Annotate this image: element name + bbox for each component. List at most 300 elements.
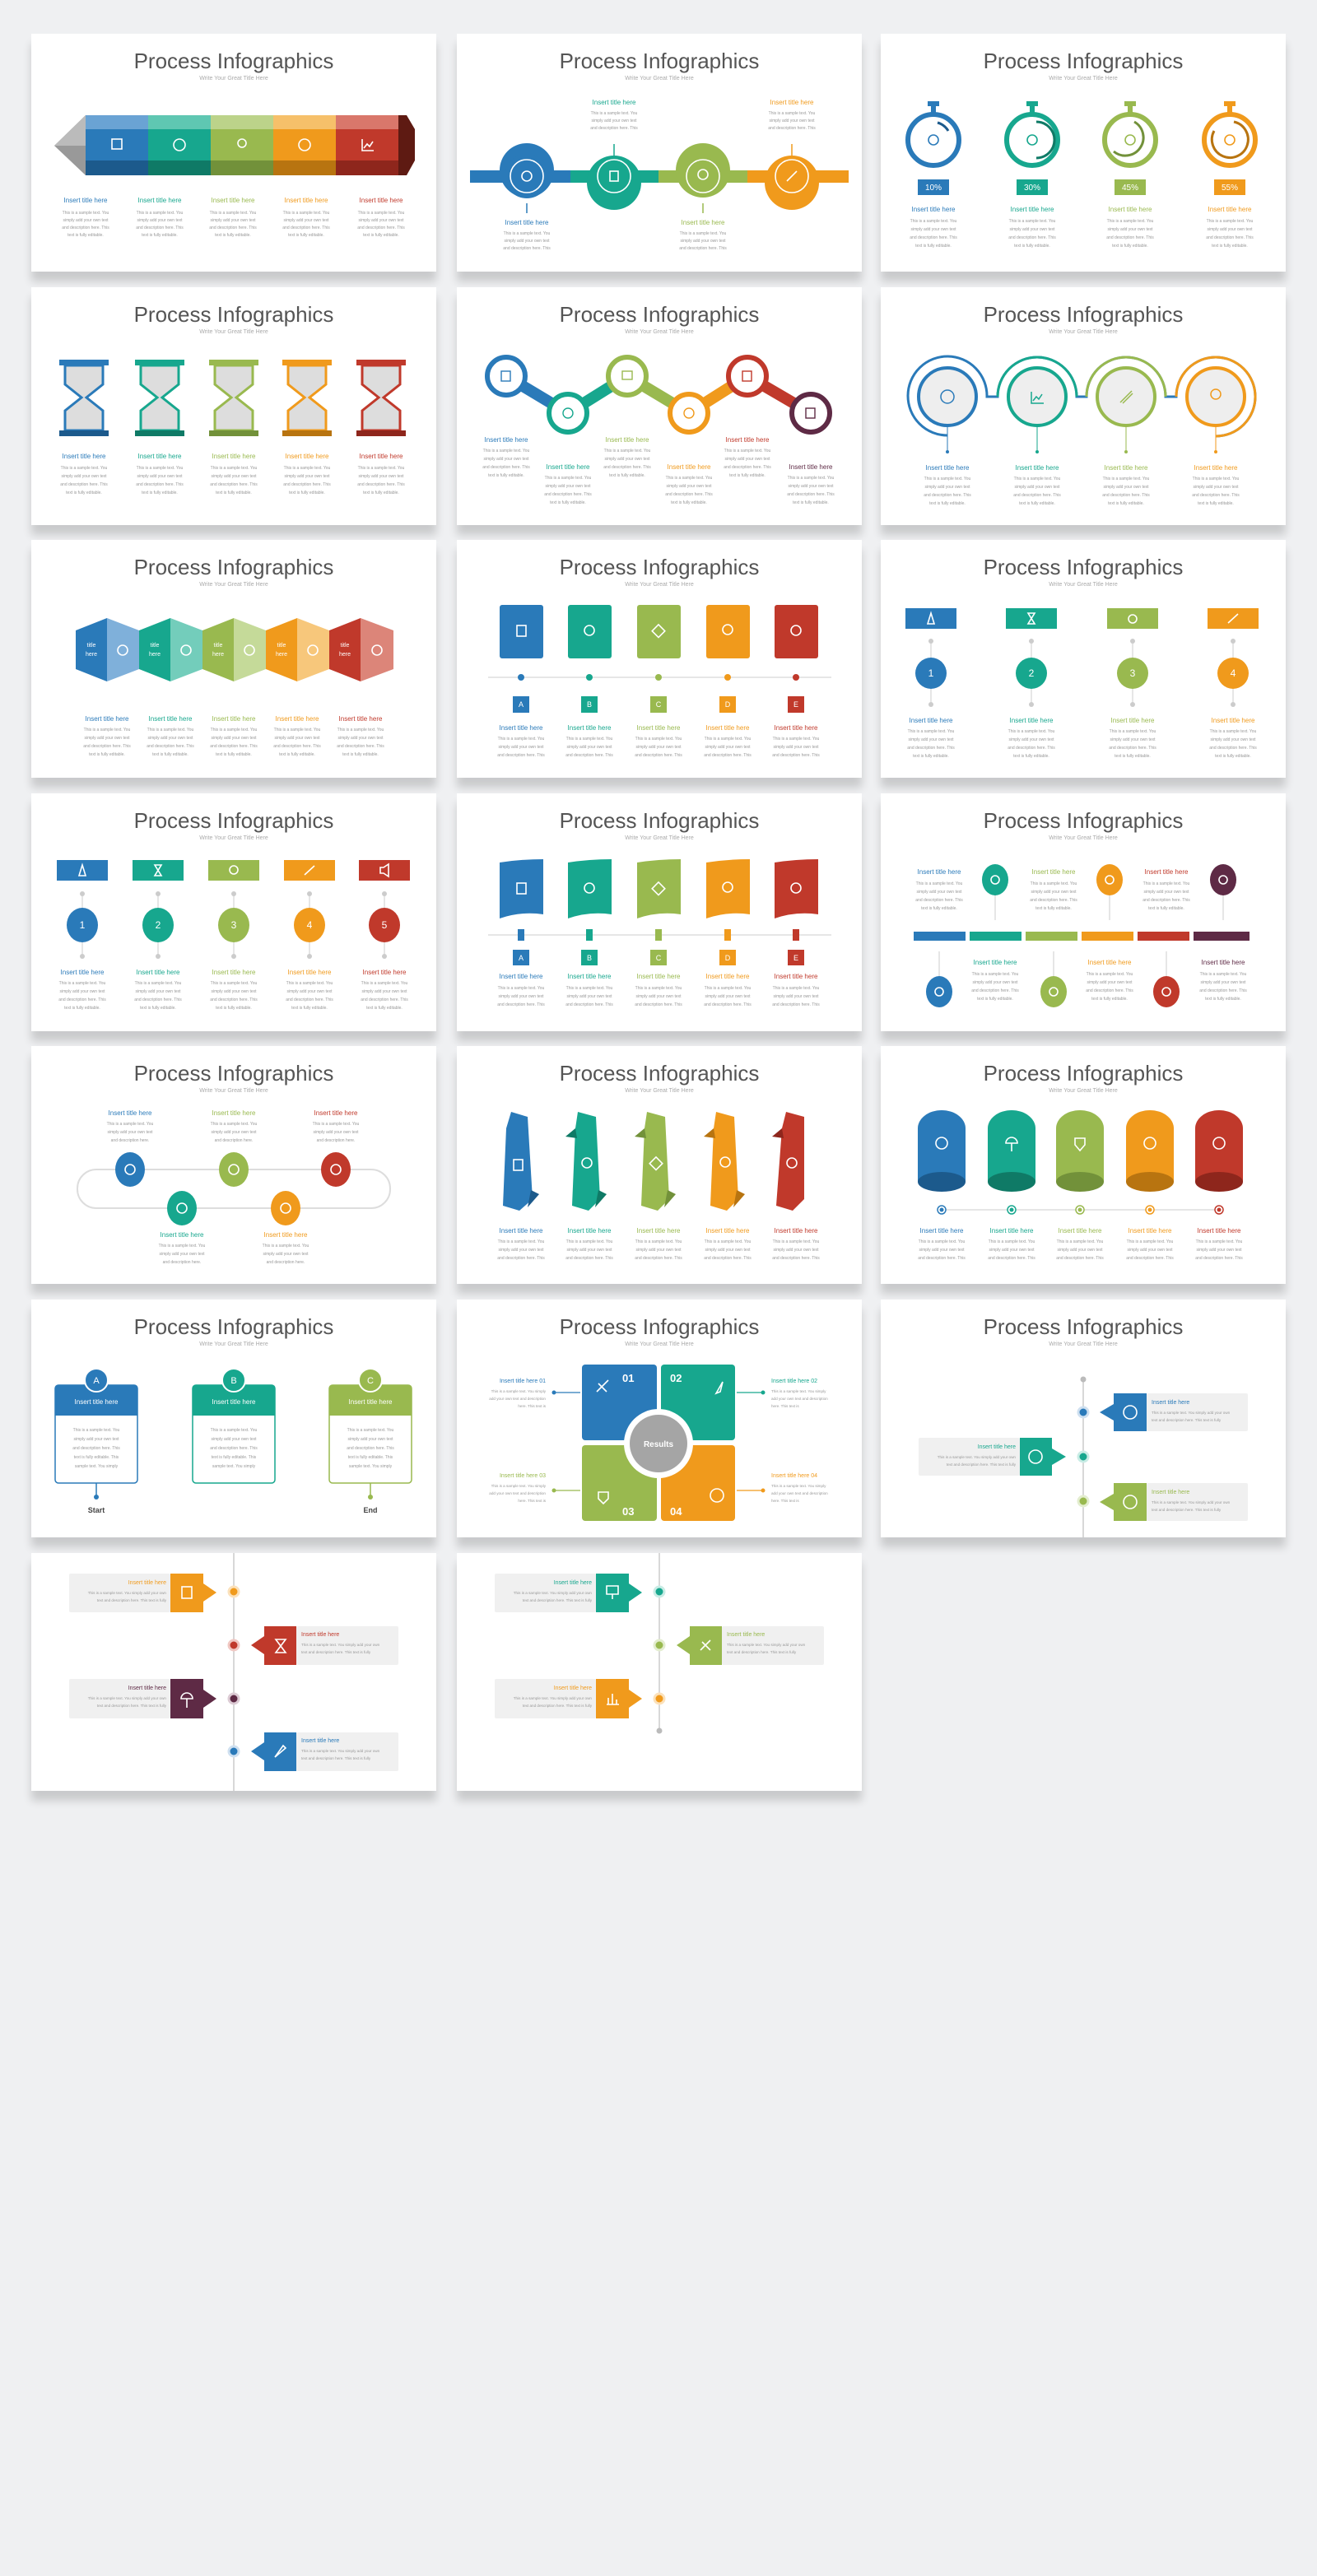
text blocks: This is a sample text. You: [1143, 881, 1190, 886]
card 2: Insert title here: [301, 1632, 339, 1638]
timeline line: [233, 1553, 235, 1791]
text blocks: text is fully editable.: [929, 501, 966, 506]
title: Process Infographics: [134, 302, 333, 327]
text blocks: This is a sample text. You: [211, 728, 258, 732]
card 1: This is a sample text. You simply add your own: [514, 1591, 592, 1595]
text blocks: text is fully editable.: [977, 997, 1013, 1002]
text blocks: text is fully editable.: [550, 500, 586, 505]
slide 10: five numbered steps: [31, 793, 436, 1031]
text blocks: Insert title here: [926, 464, 970, 472]
text blocks: simply add your own text: [274, 736, 320, 741]
card A: A: [93, 1376, 100, 1386]
text blocks: simply add your own text: [666, 484, 712, 489]
text blocks: Insert title here: [1011, 206, 1054, 213]
text blocks: Insert title here: [149, 715, 193, 723]
numbered steps chart: 5: [382, 919, 388, 931]
text blocks: This is a sample text. You: [135, 981, 182, 986]
text blocks: This is a sample text. You: [1057, 1239, 1104, 1244]
text blocks: This is a sample text. You: [788, 476, 835, 481]
text blocks: This is a sample text. You: [274, 728, 321, 732]
text blocks: Insert title here: [138, 197, 182, 204]
text blocks: This is a sample text. You: [1014, 477, 1061, 481]
text blocks: here. This text is: [771, 1499, 799, 1503]
text blocks: text is fully editable.: [1019, 501, 1055, 506]
text blocks: and description here. This: [565, 1256, 613, 1261]
title: Process Infographics: [984, 808, 1183, 833]
text blocks: Insert title here: [918, 868, 961, 876]
text blocks: This is a sample text. You: [769, 111, 816, 116]
title: Write Your Great Title Here: [625, 76, 694, 81]
card A: text is fully editable. This: [74, 1455, 119, 1460]
text blocks: and description here. This: [497, 1002, 545, 1007]
card A: This is a sample text. You: [73, 1428, 120, 1433]
text blocks: Insert title here: [910, 717, 953, 724]
text blocks: This is a sample text. You: [705, 986, 752, 991]
card 2: text and description here. This text is fully: [727, 1650, 797, 1654]
card 1: This is a sample text. You simply add your own: [88, 1591, 166, 1595]
text blocks: and description here. This: [1206, 235, 1254, 240]
card A: and description here. This: [72, 1446, 120, 1451]
text blocks: Insert title here: [339, 715, 383, 723]
card 4: Insert title here: [301, 1738, 339, 1744]
text blocks: and description here. This: [1102, 493, 1150, 498]
title: Write Your Great Title Here: [625, 835, 694, 841]
text blocks: Insert title here: [568, 973, 612, 980]
text blocks: This is a sample text. You: [211, 981, 258, 986]
card 4: [229, 1732, 398, 1771]
box timeline chart: [488, 605, 831, 713]
text blocks: and description here. This: [497, 753, 545, 758]
card C: End: [364, 1506, 377, 1514]
text blocks: simply add your own text: [924, 485, 970, 490]
card 1: Insert title here: [554, 1580, 592, 1586]
card 4: This is a sample text. You simply add your own: [301, 1749, 380, 1753]
text blocks: and description here. This: [772, 1256, 820, 1261]
folded chart: title: [214, 643, 223, 649]
text blocks: [489, 1379, 828, 1503]
text blocks: simply add your own text: [211, 474, 257, 479]
title: Write Your Great Title Here: [1049, 835, 1118, 841]
title: Write Your Great Title Here: [625, 1341, 694, 1347]
text blocks: simply add your own text: [63, 218, 109, 223]
text blocks: This is a sample text. You: [1087, 972, 1133, 977]
text blocks: Insert title here: [360, 197, 403, 204]
text blocks: and description here. This: [62, 226, 109, 230]
text blocks: and description here. This: [915, 898, 963, 903]
text blocks: This is a sample text. You: [1008, 729, 1055, 734]
text blocks: simply add your own text: [107, 1130, 153, 1135]
text blocks: simply add your own text: [84, 736, 130, 741]
text blocks: This is a sample text. You: [989, 1239, 1035, 1244]
title: Write Your Great Title Here: [625, 329, 694, 335]
card 1: [1078, 1393, 1248, 1431]
box timeline chart: D: [725, 700, 731, 709]
text blocks: simply add your own text: [1031, 890, 1077, 895]
text blocks: Insert title here: [500, 973, 543, 980]
card B: sample text. You simply: [212, 1464, 256, 1469]
text blocks: This is a sample text. You: [566, 1239, 613, 1244]
bar timeline chart: [914, 864, 1250, 1007]
text blocks: Insert title here: [1194, 464, 1238, 472]
text blocks: and description here. This: [787, 492, 835, 497]
text blocks: text is fully editable.: [915, 244, 952, 249]
text blocks: simply add your own text: [680, 239, 726, 244]
text blocks: text is fully editable.: [671, 500, 707, 505]
text blocks: simply add your own text: [591, 119, 637, 123]
text blocks: [482, 436, 835, 505]
title: Process Infographics: [134, 1061, 333, 1086]
text blocks: Insert title here: [264, 1231, 308, 1239]
text blocks: simply add your own text: [910, 227, 956, 232]
text blocks: Insert title here: [63, 453, 106, 460]
text blocks: simply add your own text: [908, 737, 954, 742]
text blocks: This is a sample text. You simply: [771, 1484, 826, 1488]
text blocks: simply add your own text: [59, 989, 105, 994]
title: Process Infographics: [560, 49, 759, 73]
card 3: Insert title here: [128, 1686, 166, 1691]
text blocks: and description here. This: [590, 126, 638, 131]
text blocks: This is a sample text. You: [724, 449, 771, 453]
text blocks: simply add your own text: [566, 994, 612, 999]
text blocks: add your own text and description: [771, 1491, 828, 1495]
numbered steps chart: [905, 608, 1259, 707]
text blocks: This is a sample text. You: [211, 1122, 258, 1127]
title: Process Infographics: [560, 555, 759, 579]
text blocks: simply add your own text: [137, 218, 183, 223]
flags chart: E: [793, 954, 798, 962]
text blocks: [915, 868, 1247, 1002]
card 3: This is a sample text. You simply add your own: [88, 1696, 166, 1700]
text blocks: text is fully editable.: [67, 233, 104, 238]
text blocks: Insert title here: [161, 1231, 204, 1239]
text blocks: text is fully editable.: [142, 233, 178, 238]
numbered steps chart: 2: [1029, 667, 1035, 679]
text blocks: Insert title here: [1088, 959, 1132, 966]
card 2: This is a sample text. You simply add your own: [301, 1643, 380, 1647]
text blocks: simply add your own text: [313, 1130, 359, 1135]
numbered steps chart: 3: [231, 919, 237, 931]
text blocks: simply add your own text: [159, 1252, 205, 1257]
wave chart: [470, 143, 849, 213]
text blocks: simply add your own text: [773, 1248, 819, 1253]
folded chart: here: [339, 652, 351, 658]
text blocks: simply add your own text: [147, 736, 193, 741]
text blocks: This is a sample text. You: [1031, 881, 1077, 886]
text blocks: [107, 1109, 360, 1265]
text blocks: Insert title here: [64, 197, 108, 204]
flags chart: A: [519, 954, 524, 962]
text blocks: Insert title here: [726, 436, 770, 444]
folded chart: here: [276, 652, 287, 658]
text blocks: This is a sample text. You: [1110, 729, 1156, 734]
text blocks: Insert title here 03: [500, 1473, 546, 1479]
text blocks: This is a sample text. You: [483, 449, 530, 453]
text blocks: simply add your own text: [61, 474, 107, 479]
folded chart: title: [151, 643, 160, 649]
text blocks: This is a sample text. You: [498, 737, 545, 742]
timeline line: [657, 1553, 662, 1733]
text blocks: and description here. This: [1126, 1256, 1174, 1261]
text blocks: simply add your own text: [604, 457, 650, 462]
text blocks: and description here. This: [209, 226, 257, 230]
title: Write Your Great Title Here: [1049, 76, 1118, 81]
card B: text is fully editable. This: [212, 1455, 257, 1460]
text blocks: simply add your own text: [286, 989, 333, 994]
text blocks: [907, 717, 1257, 759]
text blocks: here. This text is: [518, 1404, 547, 1408]
text blocks: This is a sample text. You: [1009, 219, 1056, 224]
text blocks: Insert title here: [568, 724, 612, 732]
slide 8: boxes with timeline A-E: [457, 540, 862, 778]
text blocks: This is a sample text. You: [284, 466, 331, 471]
text blocks: [910, 206, 1254, 249]
card C: sample text. You simply: [349, 1464, 393, 1469]
text blocks: and description here. This: [635, 1256, 682, 1261]
title: Write Your Great Title Here: [199, 1088, 268, 1094]
text blocks: simply add your own text: [566, 745, 612, 750]
ribbons chart: [503, 1112, 804, 1211]
title: Write Your Great Title Here: [199, 76, 268, 81]
text blocks: This is a sample text. You: [159, 1244, 206, 1248]
box timeline chart: C: [656, 700, 662, 709]
slide 4: hourglasses: [31, 287, 436, 525]
text blocks: simply add your own text: [1087, 980, 1133, 985]
text blocks: and description here.: [163, 1260, 201, 1265]
text blocks: Insert title here: [212, 197, 255, 204]
title: Process Infographics: [134, 1314, 333, 1339]
card 2: Insert title here: [727, 1632, 765, 1638]
text blocks: add your own text and description: [489, 1491, 546, 1495]
card 2: text and description here. This text is fully: [947, 1462, 1017, 1467]
card C: C: [367, 1376, 374, 1386]
text blocks: simply add your own text: [135, 989, 181, 994]
slide 17: results quadrant: [457, 1300, 862, 1537]
text blocks: and description here. This: [910, 235, 957, 240]
text blocks: and description here. This: [1030, 898, 1077, 903]
text blocks: This is a sample text. You: [705, 1239, 752, 1244]
text blocks: simply add your own text: [989, 1248, 1035, 1253]
text blocks: This is a sample text. You: [972, 972, 1019, 977]
text blocks: Insert title here: [606, 436, 649, 444]
numbered steps chart: 3: [1130, 667, 1136, 679]
slide 7: folded panels: [31, 540, 436, 778]
title: Write Your Great Title Here: [199, 582, 268, 588]
text blocks: add your own text and description: [489, 1397, 546, 1401]
text blocks: This is a sample text. You: [84, 728, 131, 732]
cylinders chart: [918, 1110, 1243, 1214]
card C: simply add your own text: [347, 1437, 393, 1442]
text blocks: and description here. This: [1199, 988, 1247, 993]
text blocks: This is a sample text. You simply: [491, 1484, 547, 1488]
text blocks: and description here. This: [971, 988, 1019, 993]
title: Process Infographics: [984, 1061, 1183, 1086]
percent labels: 55%: [1222, 184, 1238, 193]
text blocks: This is a sample text. You: [358, 211, 405, 216]
text blocks: Insert title here: [568, 1227, 612, 1235]
text blocks: This is a sample text. You: [680, 231, 727, 236]
text blocks: simply add your own text: [483, 457, 529, 462]
text blocks: and description here. This: [1086, 988, 1133, 993]
text blocks: simply add your own text: [769, 119, 815, 123]
text blocks: This is a sample text. You: [107, 1122, 154, 1127]
text blocks: simply add your own text: [1196, 1248, 1242, 1253]
text blocks: This is a sample text. You: [63, 211, 109, 216]
text blocks: and description here. This: [988, 1256, 1035, 1261]
text blocks: text is fully editable.: [216, 1006, 252, 1011]
text blocks: This is a sample text. You: [908, 729, 955, 734]
text blocks: simply add your own text: [498, 994, 544, 999]
slide 9: four numbered steps: [881, 540, 1286, 778]
title: Process Infographics: [134, 49, 333, 73]
text blocks: [497, 973, 820, 1007]
text blocks: Insert title here: [668, 463, 711, 471]
text blocks: simply add your own text: [283, 218, 329, 223]
title: Write Your Great Title Here: [199, 329, 268, 335]
card 1: [69, 1574, 239, 1612]
card 3: Insert title here: [554, 1686, 592, 1691]
percent labels: 30%: [1024, 184, 1040, 193]
text blocks: This is a sample text. You: [1103, 477, 1150, 481]
numbered steps chart: [57, 860, 410, 959]
quadrant chart: 03: [622, 1505, 634, 1518]
text blocks: and description here. This: [918, 1256, 966, 1261]
text blocks: text is fully editable.: [1014, 244, 1050, 249]
text blocks: Insert title here: [920, 1227, 964, 1235]
flags chart: B: [587, 954, 592, 962]
card C: [329, 1369, 412, 1514]
text blocks: Insert title here: [990, 1227, 1034, 1235]
title: Process Infographics: [134, 555, 333, 579]
card 3: Insert title here: [1152, 1490, 1189, 1495]
text blocks: and description here. This: [210, 997, 258, 1002]
text blocks: Insert title here: [1198, 1227, 1241, 1235]
text blocks: Insert title here: [276, 715, 319, 723]
text blocks: text is fully editable.: [289, 491, 325, 495]
text blocks: Insert title here: [1145, 868, 1189, 876]
text blocks: This is a sample text. You: [61, 466, 108, 471]
text blocks: This is a sample text. You: [773, 1239, 820, 1244]
text blocks: text is fully editable.: [1198, 501, 1234, 506]
card B: [193, 1369, 275, 1483]
text blocks: This is a sample text. You simply: [491, 1389, 547, 1393]
text blocks: Insert title here: [288, 969, 332, 976]
text blocks: simply add your own text: [1014, 485, 1060, 490]
text blocks: and description here.: [267, 1260, 305, 1265]
text blocks: and description here. This: [357, 226, 405, 230]
text blocks: Insert title here: [485, 436, 528, 444]
text blocks: Insert title here: [500, 724, 543, 732]
text blocks: Insert title here: [212, 969, 256, 976]
text blocks: This is a sample text. You: [705, 737, 752, 742]
text blocks: Insert title here: [1016, 464, 1059, 472]
text blocks: simply add your own text: [635, 1248, 682, 1253]
text blocks: Insert title here: [109, 1109, 152, 1117]
text blocks: and description here. This: [361, 997, 408, 1002]
text blocks: text is fully editable.: [793, 500, 829, 505]
title: Write Your Great Title Here: [1049, 582, 1118, 588]
text blocks: This is a sample text. You: [337, 728, 384, 732]
text blocks: Insert title here: [1208, 206, 1252, 213]
text blocks: and description here. This: [136, 226, 184, 230]
text blocks: and description here. This: [768, 126, 816, 131]
folded chart: here: [149, 652, 161, 658]
title: Process Infographics: [560, 1314, 759, 1339]
text blocks: Insert title here: [363, 969, 407, 976]
slide 2: wave circles: [457, 34, 862, 272]
flags chart: C: [656, 954, 662, 962]
text blocks: simply add your own text: [1009, 227, 1055, 232]
text blocks: text is fully editable.: [1112, 244, 1148, 249]
text blocks: and description here. This: [679, 246, 727, 251]
text blocks: simply add your own text: [263, 1252, 309, 1257]
text blocks: This is a sample text. You: [635, 986, 682, 991]
card 4: text and description here. This text is fully: [301, 1756, 371, 1760]
text blocks: and description here. This: [482, 465, 530, 470]
text blocks: Insert title here 02: [771, 1379, 817, 1384]
text blocks: and description here. This: [544, 492, 592, 497]
text blocks: text is fully editable.: [216, 752, 252, 757]
text blocks: Insert title here: [1109, 206, 1152, 213]
text blocks: simply add your own text: [916, 890, 962, 895]
card 3: This is a sample text. You simply add your own: [514, 1696, 592, 1700]
slide 3: stopwatches: [881, 34, 1286, 272]
text blocks: This is a sample text. You: [1127, 1239, 1174, 1244]
text blocks: and description here. This: [704, 1256, 752, 1261]
slide 1: pencil process: [31, 34, 436, 272]
text blocks: simply add your own text: [635, 994, 682, 999]
text blocks: here. This text is: [518, 1499, 547, 1503]
card 2: Insert title here: [978, 1444, 1016, 1450]
text blocks: Insert title here: [1105, 464, 1148, 472]
text blocks: simply add your own text: [498, 745, 544, 750]
text blocks: This is a sample text. You: [545, 476, 592, 481]
text blocks: simply add your own text: [504, 239, 550, 244]
text blocks: Insert title here: [500, 1227, 543, 1235]
box timeline chart: B: [587, 700, 592, 709]
text blocks: This is a sample text. You simply: [771, 1389, 826, 1393]
slide 18: vertical timeline three: [881, 1300, 1286, 1537]
card 3: This is a sample text. You simply add your own: [1152, 1500, 1231, 1504]
text blocks: and description here. This: [337, 744, 384, 749]
text blocks: simply add your own text: [358, 218, 404, 223]
text blocks: and description here. This: [283, 482, 331, 487]
text blocks: and description here. This: [704, 1002, 752, 1007]
text blocks: simply add your own text: [635, 745, 682, 750]
card B: B: [230, 1376, 237, 1386]
text blocks: This is a sample text. You: [919, 1239, 966, 1244]
text blocks: and description here. This: [503, 246, 551, 251]
text blocks: simply add your own text: [972, 980, 1018, 985]
text blocks: Insert title here: [547, 463, 590, 471]
text blocks: text is fully editable.: [1091, 997, 1128, 1002]
text blocks: and description here. This: [1142, 898, 1190, 903]
text blocks: and description here. This: [772, 1002, 820, 1007]
text blocks: and description here. This: [1013, 493, 1061, 498]
text blocks: text is fully editable.: [215, 233, 251, 238]
text blocks: and description here. This: [1192, 493, 1240, 498]
text blocks: Insert title here 01: [500, 1379, 546, 1384]
text blocks: [83, 715, 384, 757]
card 2: [229, 1626, 398, 1665]
text blocks: and description here. This: [635, 753, 682, 758]
text blocks: simply add your own text: [1143, 890, 1189, 895]
text blocks: This is a sample text. You: [286, 981, 333, 986]
text blocks: [924, 464, 1240, 506]
text blocks: Insert title here: [360, 453, 403, 460]
hourglass chart: [59, 360, 406, 436]
text blocks: Insert title here: [137, 969, 180, 976]
text blocks: This is a sample text. You: [1107, 219, 1154, 224]
